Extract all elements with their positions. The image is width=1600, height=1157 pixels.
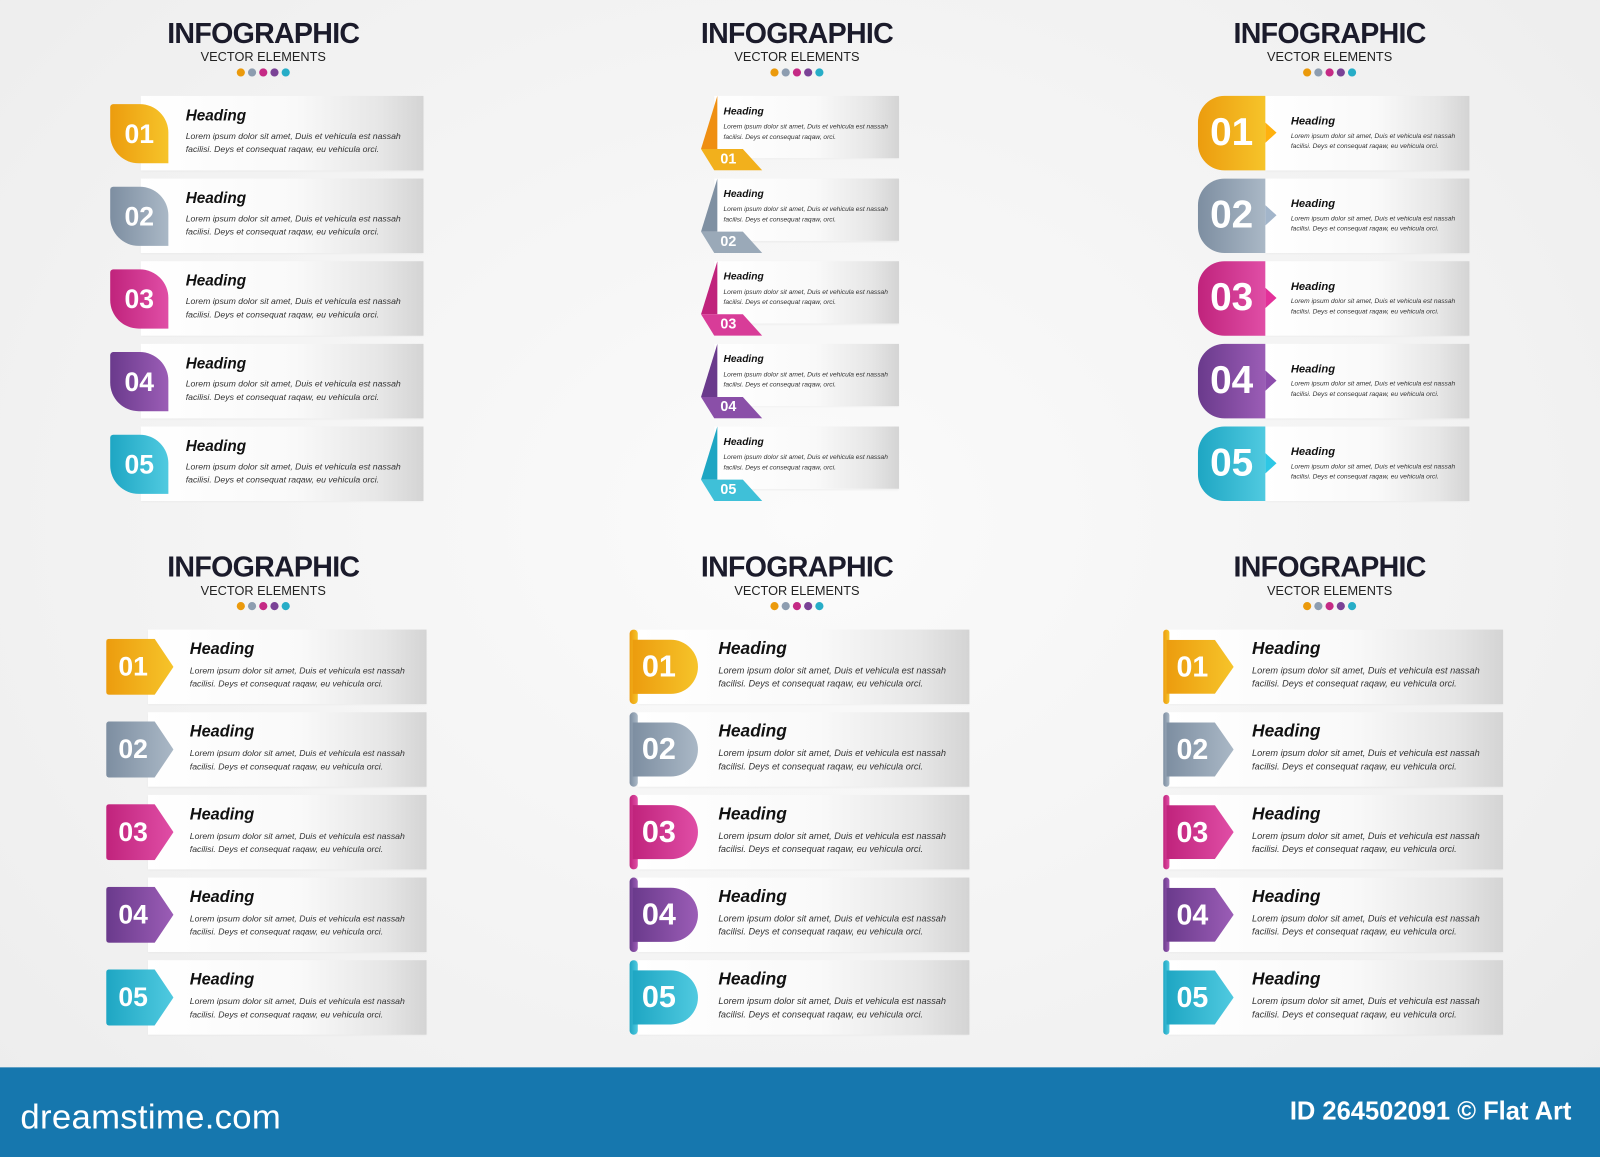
row 5-02: Lorem ipsum dolor sit amet, Duis et vehicula est nassah [718, 748, 946, 758]
row 5-05 [630, 960, 970, 1035]
row 4-03: 03 [118, 816, 148, 847]
row 5-03: 03 [642, 815, 676, 848]
row 2-01: facilisi. Deys et consequat raqaw, orci. [723, 134, 836, 141]
row 4-03: Heading [190, 806, 254, 823]
row 5-02: Heading [718, 721, 787, 741]
row 2-03 [701, 261, 899, 336]
row 3-05: 05 [1210, 442, 1253, 485]
row 5-01: facilisi. Deys et consequat raqaw, eu vehicula orci. [718, 679, 923, 689]
title 1: VECTOR ELEMENTS [201, 50, 326, 64]
row 4-05: Heading [190, 971, 254, 989]
row 3-01: facilisi. Deys et consequat raqaw, eu vehicula orci. [1291, 143, 1439, 150]
row 6-01: Lorem ipsum dolor sit amet, Duis et vehicula est nassah [1252, 665, 1480, 676]
row 4-04: Heading [190, 889, 254, 906]
row 3-05: Lorem ipsum dolor sit amet, Duis et vehicula est nassah [1291, 463, 1455, 470]
row 2-05: 05 [720, 481, 736, 497]
row 3-02 [1198, 178, 1470, 254]
title 2: INFOGRAPHIC [701, 17, 893, 49]
row 3-05 [1198, 426, 1470, 501]
row 1-01: Heading [186, 107, 246, 124]
row 1-02: Heading [186, 190, 246, 207]
row 3-02: facilisi. Deys et consequat raqaw, eu vehicula orci. [1291, 226, 1439, 233]
row 4-01: 01 [118, 651, 148, 682]
row 3-04: 04 [1210, 359, 1253, 402]
row 1-01: Lorem ipsum dolor sit amet, Duis et vehicula est nassah [186, 131, 401, 141]
row 6-02: Heading [1252, 721, 1320, 741]
row 3-04: Heading [1291, 363, 1335, 376]
row 1-01: 01 [125, 118, 154, 148]
row 3-03: facilisi. Deys et consequat raqaw, eu vehicula orci. [1291, 308, 1439, 315]
row 3-02: 02 [1210, 194, 1253, 237]
title 5: INFOGRAPHIC [701, 551, 893, 583]
row 3-02: Heading [1291, 198, 1335, 210]
row 2-01: Heading [723, 106, 764, 117]
row 6-03: facilisi. Deys et consequat raqaw, eu vehicula orci. [1252, 844, 1457, 854]
title 3: INFOGRAPHIC [1234, 17, 1426, 49]
row 1-04: 04 [125, 366, 154, 396]
row 1-04: facilisi. Deys et consequat raqaw, eu vehicula orci. [186, 392, 379, 402]
row 5-03: Lorem ipsum dolor sit amet, Duis et vehicula est nassah [718, 831, 946, 841]
row 5-04: 04 [642, 897, 676, 931]
row 6-02: facilisi. Deys et consequat raqaw, eu vehicula orci. [1252, 761, 1457, 771]
title 6: VECTOR ELEMENTS [1267, 584, 1392, 598]
row 2-02: Heading [723, 189, 764, 200]
row 3-01: Heading [1291, 115, 1335, 128]
row 2-04: Lorem ipsum dolor sit amet, Duis et vehicula est nassah [723, 371, 888, 379]
row 5-03: Heading [718, 804, 787, 823]
row 6-05: facilisi. Deys et consequat raqaw, eu vehicula orci. [1252, 1009, 1457, 1019]
row 3-05: facilisi. Deys et consequat raqaw, eu vehicula orci. [1291, 473, 1439, 481]
row 1-04: Heading [186, 355, 246, 372]
row 4-02: Lorem ipsum dolor sit amet, Duis et vehicula est nassah [190, 748, 405, 758]
row 1-04: Lorem ipsum dolor sit amet, Duis et vehicula est nassah [186, 379, 401, 389]
row 3-02: Lorem ipsum dolor sit amet, Duis et vehicula est nassah [1291, 215, 1455, 222]
row 5-01: Lorem ipsum dolor sit amet, Duis et vehicula est nassah [718, 665, 946, 676]
row 4-04 [106, 878, 426, 952]
row 2-04: Heading [723, 354, 764, 365]
title 5 [701, 551, 893, 610]
row 3-03 [1198, 261, 1470, 336]
row 3-04: facilisi. Deys et consequat raqaw, eu vehicula orci. [1291, 391, 1439, 398]
row 1-03: Lorem ipsum dolor sit amet, Duis et vehicula est nassah [186, 296, 401, 306]
row 1-03 [110, 261, 424, 336]
title 1 [167, 17, 360, 76]
row 2-02 [701, 178, 899, 253]
row 4-01 [106, 630, 426, 704]
row 2-05 [701, 426, 899, 501]
row 6-03: 03 [1177, 816, 1208, 847]
row 6-04: Heading [1252, 887, 1320, 906]
title 6: INFOGRAPHIC [1234, 551, 1426, 583]
row 2-01 [701, 96, 899, 170]
row 5-04: Lorem ipsum dolor sit amet, Duis et vehicula est nassah [718, 913, 946, 923]
row 4-02: Heading [190, 723, 254, 741]
row 2-05: Lorem ipsum dolor sit amet, Duis et vehicula est nassah [723, 454, 888, 461]
row 1-01 [110, 96, 424, 170]
row 6-04: facilisi. Deys et consequat raqaw, eu vehicula orci. [1252, 927, 1457, 937]
footer logo text: dreamstime.com [20, 1098, 281, 1137]
title 4: VECTOR ELEMENTS [201, 584, 326, 598]
row 6-02 [1163, 712, 1503, 787]
row 2-03: Heading [723, 271, 764, 283]
title 4 [167, 551, 360, 610]
row 4-01: Heading [190, 641, 254, 658]
row 1-03: 03 [125, 283, 154, 314]
row 6-03: Lorem ipsum dolor sit amet, Duis et vehicula est nassah [1252, 831, 1480, 841]
row 4-04: 04 [118, 899, 148, 930]
footer id text: ID 264502091 © Flat Art [1290, 1097, 1571, 1126]
row 1-05: 05 [125, 448, 154, 479]
row 1-04 [110, 344, 424, 418]
row 2-01: Lorem ipsum dolor sit amet, Duis et vehicula est nassah [723, 123, 888, 131]
row 1-05: Lorem ipsum dolor sit amet, Duis et vehicula est nassah [186, 461, 401, 471]
row 1-02: facilisi. Deys et consequat raqaw, eu vehicula orci. [186, 227, 379, 237]
row 5-04 [630, 878, 970, 952]
row 5-03 [630, 794, 970, 870]
row 6-02: Lorem ipsum dolor sit amet, Duis et vehicula est nassah [1252, 748, 1480, 758]
row 4-04: facilisi. Deys et consequat raqaw, eu vehicula orci. [190, 927, 383, 937]
row 3-05: Heading [1291, 446, 1335, 458]
row 1-02: Lorem ipsum dolor sit amet, Duis et vehicula est nassah [186, 213, 401, 223]
row 4-02: facilisi. Deys et consequat raqaw, eu vehicula orci. [190, 761, 383, 771]
row 2-02: 02 [720, 233, 736, 249]
row 6-01 [1163, 630, 1503, 704]
title 6 [1234, 551, 1426, 610]
row 1-05: facilisi. Deys et consequat raqaw, eu vehicula orci. [186, 474, 379, 485]
row 3-01 [1198, 96, 1470, 170]
row 1-01: facilisi. Deys et consequat raqaw, eu vehicula orci. [186, 144, 379, 154]
row 2-05: facilisi. Deys et consequat raqaw, orci. [723, 464, 836, 471]
row 5-04: facilisi. Deys et consequat raqaw, eu vehicula orci. [718, 927, 923, 937]
row 1-05 [110, 426, 424, 501]
row 4-05: 05 [118, 982, 148, 1012]
row 2-03: 03 [720, 315, 736, 332]
title 3 [1234, 17, 1426, 76]
row 6-03 [1163, 794, 1503, 870]
row 4-05 [106, 960, 426, 1035]
row 4-05: facilisi. Deys et consequat raqaw, eu vehicula orci. [190, 1009, 383, 1019]
row 4-03: facilisi. Deys et consequat raqaw, eu vehicula orci. [190, 844, 383, 854]
row 4-04: Lorem ipsum dolor sit amet, Duis et vehicula est nassah [190, 913, 405, 923]
title 3: VECTOR ELEMENTS [1267, 50, 1392, 64]
row 6-03: Heading [1252, 804, 1320, 823]
row 4-02: 02 [118, 734, 148, 764]
row 3-04: Lorem ipsum dolor sit amet, Duis et vehicula est nassah [1291, 381, 1455, 388]
title 1: INFOGRAPHIC [167, 17, 359, 49]
row 6-04: Lorem ipsum dolor sit amet, Duis et vehicula est nassah [1252, 913, 1480, 923]
row 6-05: 05 [1177, 981, 1208, 1013]
row 5-04: Heading [718, 887, 787, 906]
row 4-01: Lorem ipsum dolor sit amet, Duis et vehicula est nassah [190, 665, 405, 676]
row 6-02: 02 [1177, 733, 1208, 765]
row 5-01: Heading [718, 639, 787, 658]
row 2-04: facilisi. Deys et consequat raqaw, orci. [723, 382, 836, 389]
title 4: INFOGRAPHIC [167, 551, 359, 583]
row 5-05: facilisi. Deys et consequat raqaw, eu vehicula orci. [718, 1009, 923, 1019]
row 5-05: Lorem ipsum dolor sit amet, Duis et vehicula est nassah [718, 996, 946, 1006]
row 1-02 [110, 178, 424, 254]
row 5-03: facilisi. Deys et consequat raqaw, eu vehicula orci. [718, 844, 923, 854]
title 2 [701, 17, 893, 76]
row 6-01: facilisi. Deys et consequat raqaw, eu vehicula orci. [1252, 679, 1457, 689]
row 4-02 [106, 712, 426, 787]
row 5-01: 01 [642, 649, 676, 683]
row 6-05: Heading [1252, 969, 1320, 989]
row 3-03: 03 [1210, 277, 1253, 319]
row 3-04 [1198, 344, 1470, 418]
row 2-05: Heading [723, 437, 764, 448]
row 1-05: Heading [186, 438, 246, 455]
row 2-04 [701, 344, 899, 418]
row 6-04 [1163, 878, 1503, 952]
row 3-01: Lorem ipsum dolor sit amet, Duis et vehicula est nassah [1291, 133, 1455, 140]
row 6-05: Lorem ipsum dolor sit amet, Duis et vehicula est nassah [1252, 996, 1480, 1006]
row 3-01: 01 [1210, 111, 1253, 154]
row 1-03: Heading [186, 272, 246, 290]
panel: infographic 1 [167, 17, 360, 76]
row 4-05: Lorem ipsum dolor sit amet, Duis et vehicula est nassah [190, 996, 405, 1006]
row 5-05: Heading [718, 969, 787, 989]
row 6-01: 01 [1177, 651, 1208, 682]
row 5-02: 02 [642, 732, 676, 766]
row 4-03: Lorem ipsum dolor sit amet, Duis et vehicula est nassah [190, 831, 405, 841]
row 4-01: facilisi. Deys et consequat raqaw, eu vehicula orci. [190, 679, 383, 689]
row 5-05: 05 [642, 980, 676, 1014]
title 2: VECTOR ELEMENTS [734, 50, 860, 64]
row 6-05 [1163, 960, 1503, 1035]
row 2-02: facilisi. Deys et consequat raqaw, orci. [723, 216, 836, 223]
row 5-01 [630, 630, 970, 704]
row 4-03 [106, 795, 426, 870]
title 5: VECTOR ELEMENTS [734, 584, 860, 598]
footer bar [0, 1067, 1600, 1157]
row 2-01: 01 [720, 150, 736, 166]
row 2-04: 04 [720, 398, 736, 414]
row 5-02: facilisi. Deys et consequat raqaw, eu vehicula orci. [718, 761, 923, 771]
row 3-03: Lorem ipsum dolor sit amet, Duis et vehicula est nassah [1291, 298, 1455, 305]
row 6-01: Heading [1252, 639, 1320, 658]
row 1-03: facilisi. Deys et consequat raqaw, eu vehicula orci. [186, 309, 379, 319]
row 1-02: 02 [125, 201, 154, 231]
row 6-04: 04 [1177, 898, 1208, 930]
row 3-03: Heading [1291, 281, 1335, 293]
row 2-03: Lorem ipsum dolor sit amet, Duis et vehicula est nassah [723, 289, 888, 296]
row 2-02: Lorem ipsum dolor sit amet, Duis et vehicula est nassah [723, 206, 888, 213]
row 5-02 [630, 712, 970, 787]
row 2-03: facilisi. Deys et consequat raqaw, orci. [723, 299, 836, 306]
